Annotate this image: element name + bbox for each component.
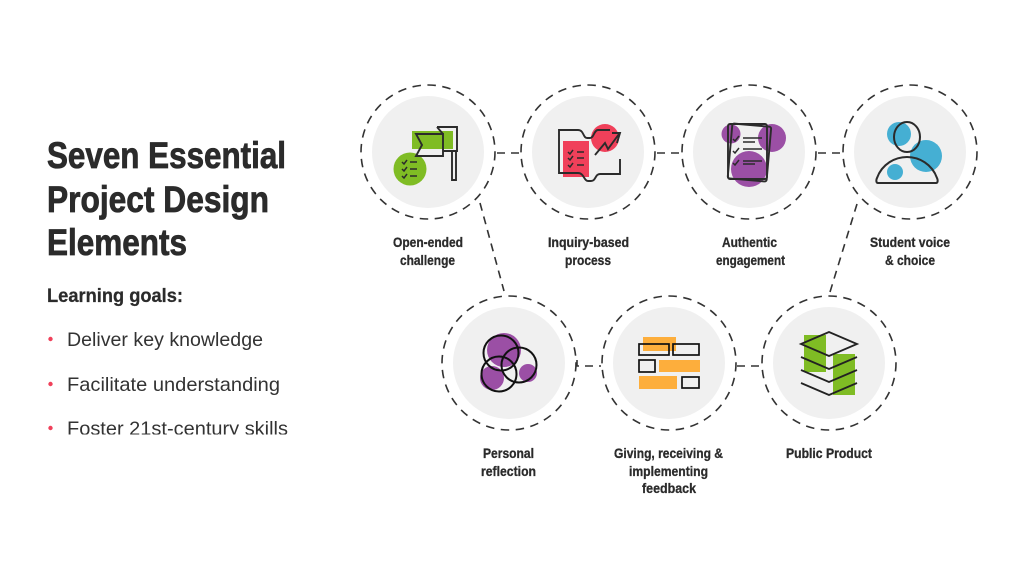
bullet list: Facilitate understanding: [67, 374, 280, 396]
element: authentic engagement: [682, 85, 816, 268]
label: [548, 234, 629, 268]
icon: stacked layers: [801, 332, 857, 395]
label: Open-ended: [393, 234, 463, 250]
label: Personal: [483, 445, 534, 461]
element: public product: [762, 296, 896, 461]
label: & choice: [885, 252, 935, 268]
label: [716, 234, 785, 268]
label: [481, 445, 536, 479]
connectors between circles: [480, 153, 857, 366]
bullet list: Deliver key knowledge: [67, 329, 263, 351]
title: Project Design: [47, 178, 269, 220]
label: [870, 234, 950, 268]
label: reflection: [481, 463, 536, 479]
label: process: [565, 252, 611, 268]
label: Public Product: [786, 445, 872, 461]
icon: overlapping circles: [480, 333, 537, 392]
element: personal reflection: [442, 296, 576, 479]
label: challenge: [400, 252, 455, 268]
label: engagement: [716, 252, 785, 268]
element: giving, receiving and implementing feedback: [602, 296, 736, 496]
label: Giving, receiving &: [614, 445, 723, 461]
icon: flag and checklist: [394, 127, 457, 186]
label: implementing: [629, 463, 708, 479]
subheading: learning goals: Learning goals:: [47, 285, 183, 307]
icon: student figure: [876, 122, 942, 183]
label: Student voice: [870, 234, 950, 250]
title: [47, 134, 286, 263]
bullet list: [48, 329, 288, 440]
icon: feedback blocks: [639, 337, 700, 389]
bullet list: Foster 21st-century skills: [67, 418, 288, 440]
label: Inquiry-based: [548, 234, 629, 250]
label: [614, 445, 723, 496]
title: Seven Essential: [47, 134, 286, 176]
element: open-ended challenge: [361, 85, 495, 268]
element: student voice and choice: [843, 85, 977, 268]
label: Authentic: [722, 234, 777, 250]
element: inquiry-based process: [521, 85, 655, 268]
title: Elements: [47, 221, 187, 263]
label: feedback: [642, 480, 696, 496]
icon: book and growth chart: [559, 124, 620, 181]
label: [393, 234, 463, 268]
icon: documents with checklist: [722, 123, 786, 187]
